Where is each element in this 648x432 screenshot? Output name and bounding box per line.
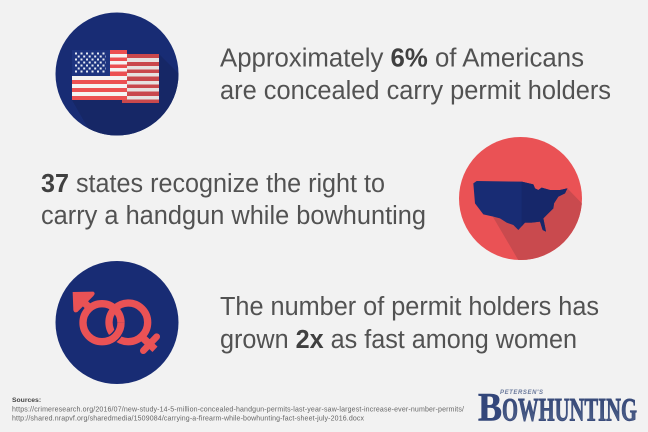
text: 37 states: 37 states recognize the right to — [41, 170, 385, 198]
icon: US map in red circle — [459, 137, 582, 260]
text: 6% of Americans: are concealed carry permit holders — [220, 77, 611, 105]
icon: interlocked gender symbols in navy circle — [56, 261, 178, 384]
icon: American flag in navy circle — [56, 12, 178, 136]
US map silhouette — [473, 181, 567, 232]
female symbol — [109, 303, 157, 351]
text: 6% of Americans: Approximately 6% of Americans — [220, 44, 584, 72]
text: 6% of Americans — [220, 44, 611, 105]
sources: Sources: — [12, 397, 41, 404]
text: 37 states: carry a handgun while bowhunting — [41, 202, 426, 230]
logo: Petersen's Bowhunting: PETERSEN'S — [500, 390, 543, 396]
sources: https://crimeresearch.org/2016/07/new-study-14-5-million-concealed-handgun-permits-last-year-saw-largest-increase-ever-number-permits/ — [12, 406, 464, 414]
text: permit holders growth — [220, 293, 599, 354]
text: 37 states — [41, 170, 426, 230]
male symbol — [73, 292, 121, 342]
sources: http://shared.nrapvf.org/sharedmedia/1509084/carrying-a-firearm-while-bowhunting-fact-sheet-july-2016.docx — [12, 416, 364, 422]
text: permit holders growth: The number of permit holders has — [220, 293, 599, 321]
logo: Petersen's Bowhunting: B — [478, 384, 502, 430]
text: permit holders growth: grown 2x as fast among women — [220, 326, 577, 354]
male ring overlap at the lower crossing — [109, 323, 121, 340]
map long shadow — [493, 188, 582, 260]
flag left panel — [72, 50, 127, 100]
sources — [12, 397, 464, 422]
flag long shadow — [72, 54, 178, 136]
flag right panel — [122, 54, 159, 103]
logo: Petersen's Bowhunting — [478, 384, 637, 430]
